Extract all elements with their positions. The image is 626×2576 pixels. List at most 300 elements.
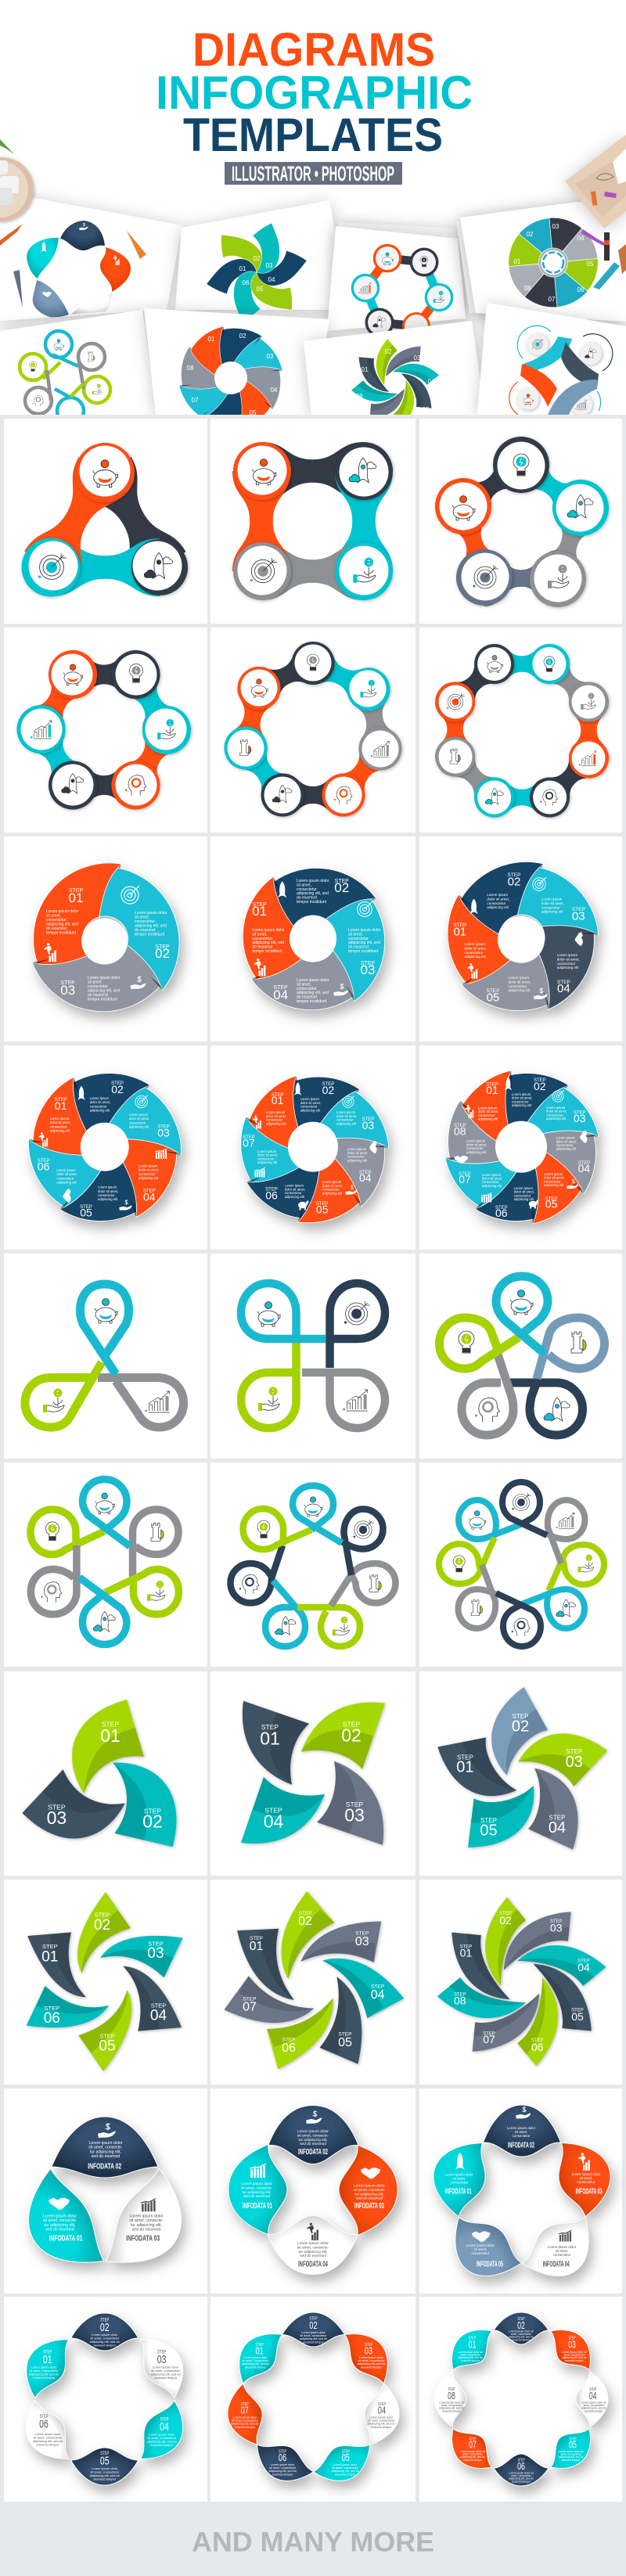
step 03: adipiscing elit, sed do bbox=[562, 2356, 587, 2359]
step 07: STEP bbox=[241, 2402, 249, 2407]
icon: plant in hand bbox=[147, 1581, 165, 1601]
infodata 02: sit amet, bbox=[515, 2130, 527, 2134]
step 03 bbox=[358, 2342, 385, 2369]
step labels: STEP bbox=[460, 1945, 472, 1949]
step labels: STEP bbox=[99, 2033, 115, 2040]
step 05: 05 bbox=[569, 2440, 577, 2451]
step 01: 01 bbox=[486, 1084, 498, 1096]
panel: loops 4 bbox=[210, 1254, 416, 1459]
step 01: Lorem ipsum dolor bbox=[31, 2366, 57, 2369]
card: small pinwheel sheet: 01 bbox=[362, 366, 369, 373]
step 04: amet, consectetur bbox=[584, 2404, 605, 2407]
step 04: Lorem ipsum dolor bbox=[297, 978, 329, 983]
step 01 bbox=[253, 1093, 286, 1128]
step 04: STEP bbox=[160, 2417, 169, 2423]
step 04: Lorem ipsum bbox=[347, 1147, 367, 1151]
step 01: STEP bbox=[453, 923, 466, 928]
step labels: 03 bbox=[566, 1754, 583, 1771]
step 01: STEP bbox=[69, 888, 83, 894]
icon: plant in hand bbox=[353, 558, 376, 583]
step labels: 05 bbox=[99, 2038, 116, 2054]
icon: chart bbox=[145, 1391, 169, 1412]
icon: bulb bbox=[257, 1520, 270, 1538]
step labels: 04 bbox=[150, 2007, 167, 2024]
step 03: consectetur bbox=[546, 1113, 563, 1117]
step 02: eiusmod tempor bbox=[512, 2338, 531, 2341]
step 01: Lorem ipsum dolor bbox=[46, 909, 79, 914]
step 06 bbox=[38, 1159, 77, 1203]
icon: chess bbox=[239, 740, 251, 756]
card: small pinwheel sheet: 03 bbox=[414, 354, 421, 362]
step 07: dolor sit amet, bbox=[257, 1153, 278, 1157]
panel: ring of 6 circles bbox=[4, 628, 207, 833]
icon: rocket bbox=[556, 1599, 576, 1617]
step 03: sit amet, consectetur bbox=[358, 2359, 385, 2362]
step 04: sit amet, consectetur bbox=[147, 2436, 177, 2440]
step 01: adipiscing elit bbox=[464, 955, 487, 959]
step 02: amet, consectetur bbox=[511, 2333, 532, 2336]
step 04: adipiscing elit, sed do bbox=[146, 2440, 177, 2444]
step 06: STEP bbox=[40, 2414, 49, 2419]
step labels bbox=[260, 1721, 365, 1831]
step 03: STEP bbox=[157, 2350, 167, 2355]
step 05: consectetur bbox=[544, 1179, 561, 1183]
step 06: adipiscing elit bbox=[285, 1195, 305, 1199]
card: swirl donut sheet: 05 bbox=[250, 409, 257, 416]
step 04: Lorem ipsum bbox=[139, 1164, 158, 1167]
card: segmented pie sheet: 05 bbox=[587, 261, 594, 268]
step 02: consectetur bbox=[90, 1104, 107, 1108]
step 02 bbox=[90, 2318, 121, 2348]
step 04: adipiscing elit, sed do bbox=[367, 2423, 395, 2426]
card: segmented pie sheet: 08 bbox=[524, 285, 531, 292]
step 05 bbox=[90, 2451, 121, 2481]
infodata 03: tur adipiscing elit, bbox=[354, 2192, 384, 2196]
panel: ring of 7 circles bbox=[210, 628, 416, 833]
step 01: sit amet, consectetur bbox=[242, 2359, 269, 2362]
card: segmented pie sheet: 04 bbox=[577, 235, 585, 242]
panel: ring of 5 circles bbox=[419, 419, 622, 624]
step labels: 07 bbox=[243, 2000, 257, 2013]
panel: pinwheel 3 steps bbox=[4, 1671, 207, 1876]
infodata 01: sit amet, consecte- bbox=[241, 2186, 273, 2190]
step 03: Lorem ipsum dolor bbox=[88, 976, 121, 980]
step 05: STEP bbox=[80, 1205, 92, 1210]
card: segmented pie sheet: 02 bbox=[527, 231, 534, 238]
infodata 04: tur adipiscing elit, bbox=[298, 2250, 328, 2254]
step 03: do eiusmod bbox=[88, 993, 108, 998]
step 04: 04 bbox=[378, 2405, 386, 2416]
step 03 bbox=[562, 2336, 587, 2362]
step 03: Lorem ipsum bbox=[541, 897, 563, 901]
step 06: STEP bbox=[495, 1206, 508, 1211]
step 01: Lorem ipsum dolor bbox=[243, 2356, 268, 2359]
icon: chart bbox=[31, 721, 52, 739]
step 04: consectetur bbox=[557, 962, 576, 966]
step 03: STEP bbox=[574, 1111, 586, 1116]
step 07: consectetur bbox=[482, 1180, 499, 1184]
step 08 bbox=[439, 2387, 464, 2412]
step 02: consectetur bbox=[297, 887, 317, 892]
infodata 05: consectetur bbox=[471, 2251, 490, 2255]
step 07: adipiscing elit bbox=[482, 1184, 502, 1188]
step 02: tempor incididunt bbox=[297, 900, 327, 905]
step 04 bbox=[367, 2402, 395, 2429]
step labels: 05 bbox=[571, 2010, 584, 2023]
step labels: STEP bbox=[48, 1803, 66, 1811]
step 06: 06 bbox=[265, 1189, 278, 1201]
icon: head with gear bbox=[125, 775, 146, 796]
step 08: consectetur bbox=[466, 1146, 484, 1150]
step labels: 04 bbox=[264, 1811, 283, 1831]
step labels: STEP bbox=[346, 1801, 363, 1808]
icon: piggy bank bbox=[95, 1493, 114, 1514]
step 02: eiusmod tempor bbox=[303, 2340, 324, 2344]
step 01 bbox=[44, 888, 83, 962]
card: small pinwheel sheet: 04 bbox=[428, 378, 435, 385]
step 05: Lorem ipsum dolor bbox=[333, 2463, 358, 2466]
step 07: STEP bbox=[469, 2437, 477, 2441]
infodata 02: consectetur bbox=[513, 2134, 531, 2138]
step 04: consectetur bbox=[297, 987, 317, 991]
icon: piggy bank bbox=[469, 1511, 486, 1529]
step 02: adipiscing elit, sed bbox=[135, 923, 167, 928]
step 01: 01 bbox=[469, 2340, 476, 2351]
step 05: Lorem ipsum dolor sit bbox=[559, 2450, 583, 2453]
step 05: STEP bbox=[487, 988, 499, 994]
step 03 bbox=[533, 877, 585, 923]
step 01: adipiscing elit, sed do bbox=[242, 2362, 269, 2366]
step 06: Lorem ipsum bbox=[56, 1168, 76, 1172]
step 01 bbox=[465, 1082, 498, 1121]
step 04: dolor sit amet, bbox=[556, 1139, 577, 1143]
step 05: sit amet, consectetur bbox=[332, 2466, 359, 2470]
step 04: eiusmod tempor bbox=[150, 2443, 174, 2447]
infodata 02 bbox=[297, 2110, 329, 2157]
icon: chart bbox=[371, 741, 390, 757]
step 04: adipiscing elit, sed bbox=[297, 991, 329, 995]
step 01: sit amet, bbox=[46, 914, 61, 919]
step 04: consectetur bbox=[347, 1155, 365, 1159]
infodata 02: Lorem ipsum dolor bbox=[297, 2129, 329, 2134]
step 01: Lorem ipsum dolor bbox=[252, 928, 285, 933]
step 03: Lorem ipsum dolor bbox=[359, 2356, 384, 2359]
infodata 02: INFODATA 02 bbox=[298, 2148, 328, 2157]
step 02: consectetur bbox=[487, 901, 506, 905]
step 05: sit amet, consectetur bbox=[90, 2470, 120, 2474]
step 04: Lorem ipsum bbox=[556, 1136, 575, 1140]
step 02: adipiscing elit, sed do bbox=[509, 2336, 534, 2339]
step 03: Lorem ipsum bbox=[546, 1106, 566, 1110]
infodata 03: sit amet, consecte- bbox=[354, 2188, 386, 2193]
step 03: consectetur bbox=[541, 905, 560, 909]
step labels bbox=[243, 1911, 385, 2055]
step labels: STEP bbox=[243, 1996, 256, 2002]
icon: rocket bbox=[349, 458, 376, 483]
step 03: sit amet, bbox=[88, 980, 103, 984]
step labels: 02 bbox=[512, 1718, 529, 1735]
step 05: adipiscing elit bbox=[509, 988, 531, 992]
step 01: consectetur bbox=[252, 937, 273, 941]
step 02: Lorem ipsum dolor bbox=[301, 2331, 326, 2334]
step 01: STEP bbox=[256, 2342, 264, 2348]
step 07: eiusmod tempor bbox=[235, 2426, 256, 2429]
step 03: sit amet, bbox=[348, 932, 363, 937]
step 01: eiusmod tempor bbox=[461, 2359, 480, 2362]
icon: rocket bbox=[567, 495, 593, 518]
step 01: do eiusmod bbox=[252, 945, 272, 950]
step 04 bbox=[273, 978, 348, 1004]
step 08: Lorem ipsum bbox=[466, 1139, 486, 1143]
step 05: amet, consectetur bbox=[560, 2453, 582, 2456]
step 04: eiusmod tempor bbox=[371, 2426, 392, 2429]
step 03: STEP bbox=[365, 2342, 372, 2348]
step 02 bbox=[278, 879, 349, 905]
step 06: amet, consectetur bbox=[511, 2474, 532, 2477]
step labels: 01 bbox=[260, 1729, 280, 1749]
step 02: 02 bbox=[534, 1080, 546, 1092]
step 08: 08 bbox=[448, 2391, 455, 2402]
card: small pinwheel sheet: 02 bbox=[385, 348, 392, 355]
step 02: 02 bbox=[334, 880, 349, 895]
step 03: STEP bbox=[572, 907, 585, 912]
icon: bulb bbox=[544, 657, 555, 671]
infodata 05: Lorem ipsum dolor bbox=[466, 2243, 495, 2247]
card: small pinwheel sheet: 08 bbox=[356, 393, 363, 400]
step 06: 06 bbox=[517, 2462, 525, 2472]
step 02: dolor sit amet, bbox=[90, 1100, 110, 1104]
icon: rocket bbox=[485, 788, 503, 804]
step 05: Lorem ipsum bbox=[544, 1172, 563, 1176]
step labels: 06 bbox=[44, 2010, 60, 2027]
step 03: tempor incididunt bbox=[348, 949, 379, 954]
step 05: Lorem ipsum bbox=[509, 976, 529, 980]
title line: infographic: INFOGRAPHIC bbox=[156, 67, 473, 119]
step 01: adipiscing elit, sed do bbox=[29, 2373, 59, 2376]
step labels: STEP bbox=[42, 1943, 58, 1950]
step labels: STEP bbox=[355, 1930, 369, 1936]
icon: rocket bbox=[544, 1398, 570, 1421]
step 08: dolor sit amet, bbox=[466, 1142, 487, 1146]
step labels: STEP bbox=[531, 2038, 544, 2043]
step labels: 02 bbox=[499, 1914, 512, 1927]
card: segmented pie sheet: 07 bbox=[549, 296, 556, 303]
step 01: adipiscing elit, sed bbox=[46, 922, 78, 926]
card: pinwheel sheet: 04 bbox=[268, 276, 275, 283]
step 06: 06 bbox=[39, 2417, 49, 2430]
step labels: 02 bbox=[341, 1725, 362, 1745]
icon: target bbox=[447, 693, 465, 710]
step 01: consectetur bbox=[266, 1118, 283, 1122]
step 02: 02 bbox=[517, 2320, 525, 2331]
step 06: adipiscing elit, sed do bbox=[33, 2439, 63, 2443]
panel: pinwheel 5 steps bbox=[419, 1671, 622, 1876]
step 01: 01 bbox=[55, 1099, 67, 1112]
step 07: dolor sit amet, bbox=[482, 1177, 502, 1181]
step 06: eiusmod tempor bbox=[272, 2473, 293, 2476]
infodata 03: consectetur bbox=[577, 2180, 595, 2184]
step 04: 04 bbox=[143, 1190, 156, 1203]
step 01 bbox=[252, 902, 285, 976]
step 05: STEP bbox=[316, 1202, 329, 1207]
icon: target bbox=[250, 558, 277, 583]
infodata 01: consectetur bbox=[450, 2181, 469, 2185]
icon: chess bbox=[571, 1332, 586, 1353]
step 02: Lorem ipsum dolor bbox=[297, 879, 329, 883]
icon: rocket bbox=[275, 1616, 296, 1635]
card: swirl donut sheet: 01 bbox=[208, 336, 215, 343]
step 03: adipiscing elit, sed do bbox=[151, 2373, 182, 2376]
infodata 03 bbox=[126, 2198, 164, 2243]
step 02: Lorem ipsum dolor bbox=[135, 911, 167, 916]
step 03 bbox=[151, 2350, 182, 2380]
step 02: STEP bbox=[155, 944, 170, 950]
step 01: Lorem ipsum bbox=[478, 1106, 498, 1110]
step labels: 01 bbox=[456, 1759, 474, 1776]
infodata 02: INFODATA 02 bbox=[88, 2163, 121, 2171]
step 02: dolor sit amet, bbox=[487, 897, 509, 901]
panel: loops 5 bbox=[419, 1254, 622, 1459]
step 05: adipiscing elit, sed do bbox=[90, 2473, 121, 2477]
infodata 02 bbox=[88, 2123, 123, 2171]
step 03: STEP bbox=[61, 980, 75, 986]
step 06: 06 bbox=[279, 2453, 286, 2463]
step 01: 01 bbox=[256, 2346, 264, 2357]
card: small pinwheel sheet: 05 bbox=[423, 406, 430, 413]
step 03: 03 bbox=[365, 2346, 372, 2357]
step 02: STEP bbox=[534, 1078, 546, 1083]
step 02: do eiusmod bbox=[135, 928, 155, 933]
infodata 03: Lorem ipsum dolor bbox=[130, 2214, 164, 2218]
step 08: Lorem ipsum dolor sit bbox=[439, 2401, 464, 2404]
infodata 01: INFODATA 01 bbox=[243, 2202, 272, 2211]
props: bowl with erasers and pencils bbox=[0, 139, 146, 308]
step labels: 02 bbox=[298, 1915, 312, 1928]
step 04: STEP bbox=[359, 1171, 372, 1175]
step 07 bbox=[460, 2437, 485, 2462]
panel: swirl donut 8 steps bbox=[419, 1045, 622, 1250]
step labels bbox=[454, 1912, 590, 2053]
icon: plant in hand bbox=[577, 1555, 594, 1573]
step 08: STEP bbox=[454, 1124, 466, 1128]
step 01 bbox=[29, 2350, 59, 2380]
step 04: consectetur bbox=[556, 1143, 574, 1147]
step labels: 05 bbox=[480, 1822, 498, 1840]
icon: rocket bbox=[93, 1612, 115, 1632]
step 04: adipiscing elit bbox=[347, 1158, 368, 1162]
panel: leaf ring 3 bbox=[4, 2089, 207, 2294]
step 01: 01 bbox=[272, 1094, 284, 1106]
card: navy leaf ring sheet bbox=[0, 188, 182, 321]
step 02: Lorem ipsum bbox=[300, 1097, 319, 1101]
step 02 bbox=[294, 1082, 334, 1112]
step 05: 05 bbox=[316, 1203, 329, 1216]
step 01: do eiusmod bbox=[46, 926, 67, 931]
step 07: STEP bbox=[243, 1135, 255, 1140]
step 03: consectetur bbox=[348, 937, 369, 941]
infodata 02 bbox=[507, 2106, 536, 2150]
card: small pinwheel sheet bbox=[304, 321, 485, 427]
infodata 01: Lorem ipsum dolor bbox=[43, 2214, 77, 2218]
step 04: dolor sit amet, bbox=[139, 1168, 159, 1172]
infodata 03: sit amet, consecte- bbox=[129, 2218, 164, 2223]
step 01: 01 bbox=[453, 925, 466, 939]
step labels bbox=[456, 1713, 583, 1840]
step labels: STEP bbox=[577, 1959, 590, 1964]
step 01: sit amet, consectetur bbox=[30, 2369, 59, 2373]
step 06: Lorem ipsum dolor sit bbox=[509, 2471, 534, 2474]
step 07: 07 bbox=[241, 2405, 249, 2416]
step labels: 03 bbox=[355, 1935, 369, 1948]
infodata 01: Lorem ipsum dolor bbox=[445, 2173, 473, 2177]
step 03: STEP bbox=[362, 1117, 374, 1122]
step 04: STEP bbox=[378, 2402, 386, 2407]
step 01: adipiscing elit, sed do bbox=[458, 2356, 483, 2359]
step 04: Lorem ipsum bbox=[557, 953, 577, 957]
step 04: 04 bbox=[557, 982, 570, 995]
infodata 01: sed do eiusmod bbox=[45, 2227, 74, 2232]
step 05: eiusmod tempor bbox=[93, 2477, 117, 2481]
step 07: STEP bbox=[459, 1172, 471, 1177]
step 03: 03 bbox=[157, 2352, 166, 2366]
panel: loops 6 bbox=[4, 1462, 207, 1667]
panel: loops 3 bbox=[4, 1254, 207, 1459]
step 05: Lorem ipsum dolor bbox=[92, 2466, 118, 2470]
step labels: 01 bbox=[250, 1940, 263, 1953]
infodata 01: sit amet, bbox=[452, 2177, 466, 2181]
step 02: adipiscing elit bbox=[300, 1108, 321, 1112]
step 05: 05 bbox=[100, 2454, 110, 2467]
infodata 02: sit amet, consecte- bbox=[88, 2146, 123, 2150]
step 03 bbox=[336, 1096, 374, 1131]
infodata 01: INFODATA 01 bbox=[445, 2188, 472, 2196]
step 01 bbox=[458, 2336, 483, 2362]
step 02 bbox=[121, 886, 170, 961]
step 03: dolor sit amet, bbox=[129, 1117, 149, 1121]
icon: target bbox=[473, 565, 498, 588]
step 03: 03 bbox=[157, 1126, 170, 1139]
step 02: STEP bbox=[322, 1082, 334, 1087]
step labels: STEP bbox=[95, 1912, 110, 1919]
step 05 bbox=[332, 2449, 359, 2476]
step 06: Lorem ipsum bbox=[514, 1186, 533, 1190]
card: segmented pie sheet: 01 bbox=[514, 258, 521, 265]
step 01: dolor sit amet, bbox=[50, 1121, 70, 1124]
step labels: 08 bbox=[454, 1995, 466, 2007]
step 04: dolor sit amet, bbox=[557, 957, 580, 961]
icon: head with gear bbox=[41, 1582, 62, 1603]
infodata 02: INFODATA 02 bbox=[508, 2141, 534, 2150]
panel: pinwheel 4 steps bbox=[210, 1671, 416, 1876]
step 04: STEP bbox=[578, 1161, 590, 1166]
step 02: sit amet, bbox=[297, 883, 311, 887]
infodata 04: Lorem ipsum dolor bbox=[548, 2245, 577, 2249]
panel: swirl donut 5 steps bbox=[418, 836, 622, 1042]
step 07: eiusmod tempor bbox=[463, 2459, 483, 2462]
step 02: 02 bbox=[100, 2320, 110, 2333]
step 02: 02 bbox=[111, 1083, 124, 1096]
panel: pinwheel 6 steps bbox=[4, 1880, 207, 2085]
step 02: dolor sit amet, bbox=[300, 1101, 321, 1105]
icon: piggy bank bbox=[510, 1290, 533, 1315]
step 06: STEP bbox=[38, 1159, 49, 1164]
step 05: adipiscing elit bbox=[98, 1197, 118, 1201]
icon: target bbox=[512, 1493, 531, 1510]
step labels: STEP bbox=[457, 1754, 473, 1761]
step 04: eiusmod tempor bbox=[585, 2409, 603, 2412]
step 01: dolor sit amet, bbox=[478, 1110, 498, 1114]
step 06: dolor sit amet, bbox=[514, 1190, 534, 1194]
